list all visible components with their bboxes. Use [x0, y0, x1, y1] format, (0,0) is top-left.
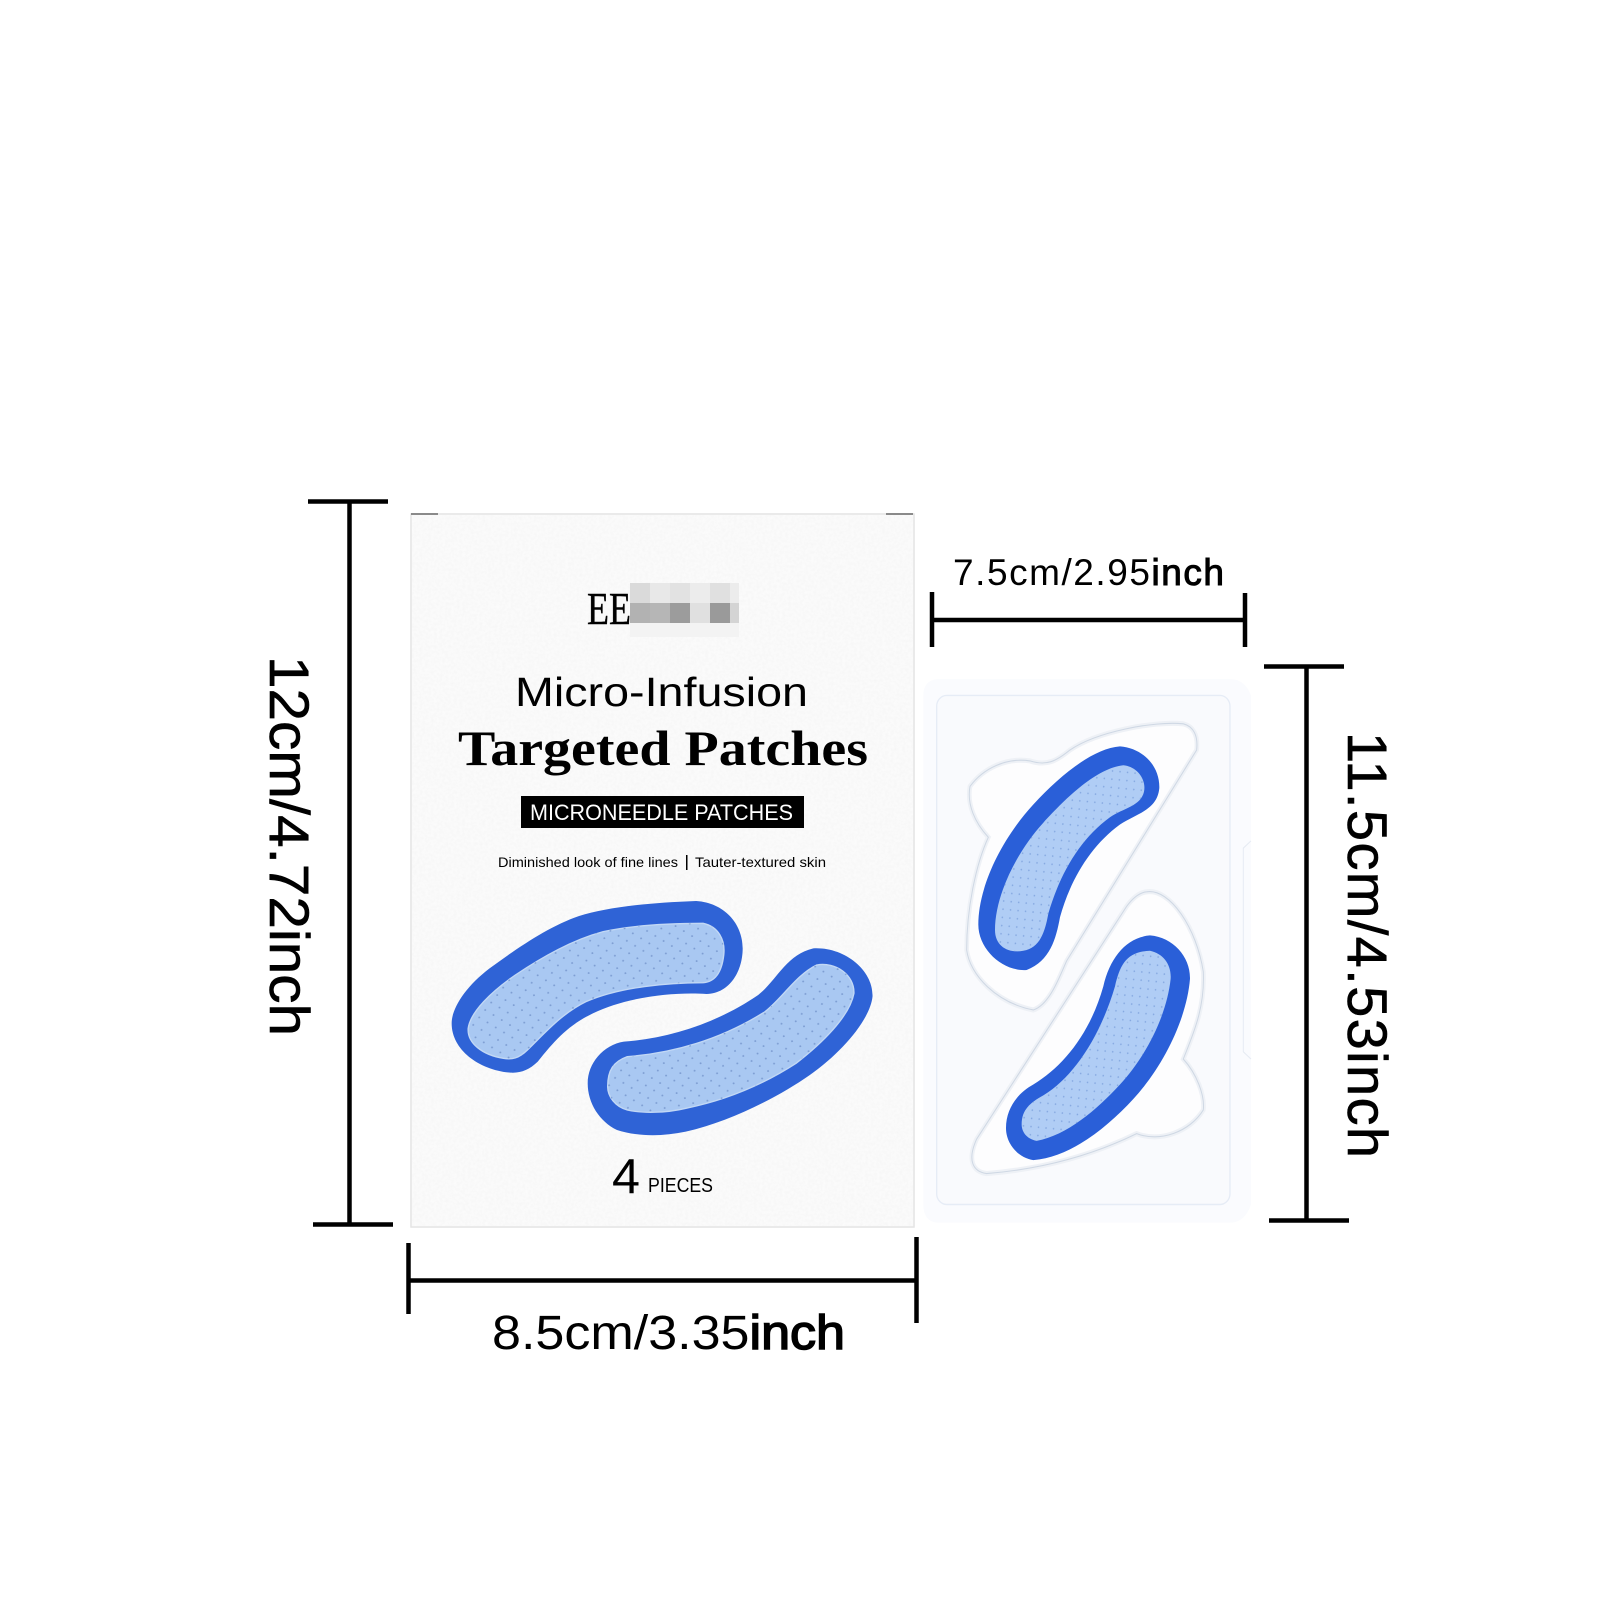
dimension: tray height — [1264, 666, 1399, 1222]
dimension: box height — [258, 501, 393, 1225]
piece count: PIECES — [648, 1175, 713, 1197]
patch upper left — [452, 901, 743, 1073]
dimension: tray width — [932, 552, 1245, 647]
heading: Micro-Infusion: Micro-Infusion — [515, 669, 808, 715]
blister cavity upper — [967, 723, 1197, 1010]
piece count: 4 — [612, 1150, 640, 1204]
panel: product box — [411, 514, 914, 1227]
tray patch lower — [1006, 935, 1190, 1160]
tray outer — [923, 679, 1251, 1223]
tray side notch — [1243, 841, 1251, 1059]
tray inner recess — [937, 695, 1230, 1204]
tagline: Tauter-textured skin — [695, 854, 826, 870]
box top edge marks — [411, 513, 913, 515]
piece count — [612, 1150, 713, 1204]
box face — [411, 514, 914, 1227]
blister cavity lower — [972, 892, 1204, 1174]
tagline — [498, 854, 826, 870]
tagline: Diminished look of fine lines — [498, 854, 678, 870]
brand logo with mosaic: EE — [587, 583, 631, 634]
patch lower right — [588, 948, 873, 1135]
dimension: box width — [408, 1237, 917, 1360]
dimension: tray height: 11.5cm/4.53inch — [1336, 732, 1399, 1158]
dimension: box height: 12cm/4.72inch — [258, 656, 321, 1036]
icon: box patches — [452, 901, 873, 1135]
heading: Targeted Patches: Targeted Patches — [458, 720, 868, 776]
dimension: box width: 8.5cm/3.35 inch — [492, 1307, 845, 1360]
tray patch upper — [978, 746, 1159, 970]
panel: blister tray — [923, 679, 1251, 1223]
black label: microneedle patches: MICRONEEDLE PATCHES — [530, 800, 793, 825]
brand logo with mosaic — [587, 583, 739, 637]
dimension: tray width: 7.5cm/2.95inch — [953, 552, 1224, 593]
